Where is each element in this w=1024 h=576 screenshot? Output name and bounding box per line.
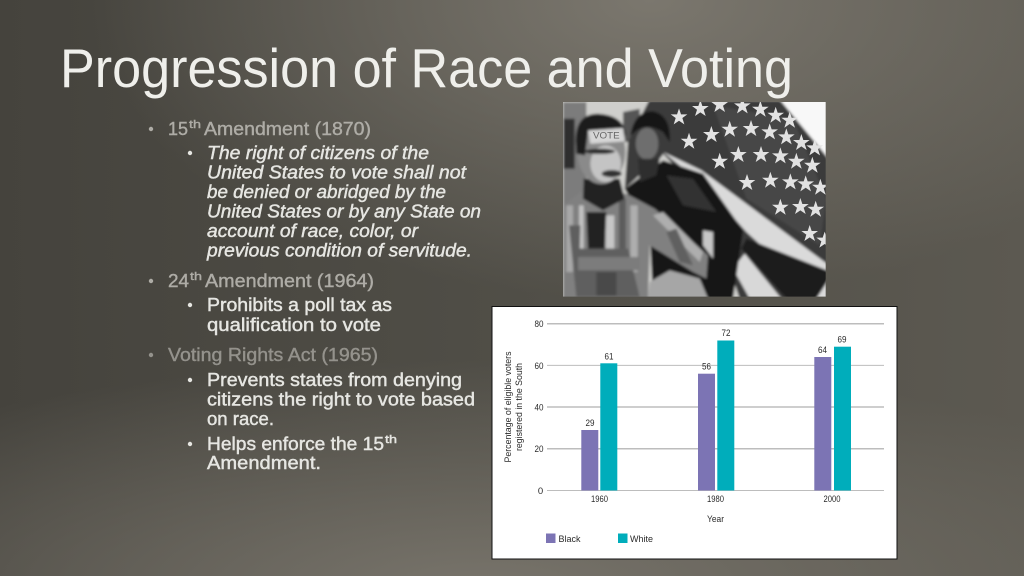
- y axis labels: [534, 319, 544, 497]
- x axis labels: 1960: [591, 494, 608, 505]
- sub-bullet: quotation of the 15th Amendment: be denied or abridged by the: [207, 181, 446, 202]
- legend: White: [618, 534, 653, 545]
- sub-bullet: helps enforce: th: [385, 434, 397, 446]
- sub-bullet: poll tax: [188, 294, 392, 335]
- bullet: 15th Amendment heading: Amendment (1870): [204, 118, 371, 139]
- bars: 1960: 29: [586, 418, 594, 429]
- sub-bullet: prevents denial: on race.: [207, 408, 274, 429]
- legend: Black: Black: [558, 534, 581, 545]
- y axis title: Percentage of eligible voters: [503, 351, 514, 462]
- bars: 2000: 64: [818, 345, 827, 356]
- legend: Black: [546, 534, 581, 545]
- sub-bullet: quotation of the 15th Amendment: United States or by any State on: [207, 200, 481, 222]
- y axis labels: 20: [534, 444, 544, 455]
- sub-bullet: quotation of the 15th Amendment: previous condition of servitude.: [206, 240, 472, 260]
- sub-bullet: helps enforce: Helps enforce the 15: [207, 433, 384, 454]
- sub-bullet: prevents denial: [188, 369, 475, 429]
- bars: 1960: 61: [604, 352, 614, 362]
- y axis labels: 80: [534, 319, 544, 330]
- x axis labels: [591, 494, 840, 505]
- sub-bullet: prevents denial: citizens the right to vote based: [207, 388, 475, 410]
- bars: 1980: 56: [702, 362, 711, 372]
- bullet: 24th Amendment heading: Amendment (1964): [205, 270, 374, 291]
- y axis title: registered in the South: [514, 363, 525, 451]
- sub-bullet: poll tax: qualification to vote: [207, 314, 381, 335]
- sub-bullet: quotation of the 15th Amendment: account of race, color, or: [207, 220, 419, 241]
- gridlines: [547, 324, 884, 490]
- y axis title: [503, 351, 525, 462]
- bullet: 24th Amendment heading: 24: [168, 270, 189, 291]
- text block: bullet list: [149, 118, 481, 473]
- y axis labels: 40: [534, 402, 544, 414]
- x axis labels: 2000: [824, 494, 840, 505]
- x axis labels: 1980: [707, 494, 724, 505]
- chart panel: [492, 306, 897, 559]
- y axis labels: 0: [538, 486, 543, 497]
- sub-bullet: quotation of the 15th Amendment: [188, 142, 481, 260]
- sub-bullet: poll tax: Prohibits a poll tax as: [207, 294, 392, 315]
- bullet: 15th Amendment heading: 15: [168, 118, 188, 139]
- photo detail: forehead VOTE: VOTE: [593, 130, 620, 140]
- legend: White: White: [630, 534, 653, 545]
- sub-bullet: helps enforce: [188, 433, 397, 473]
- bullet: 24th Amendment heading: th: [190, 271, 202, 283]
- bullet: Voting Rights Act heading: Voting Rights Act (1965): [168, 344, 378, 365]
- bars: 2000: 69: [838, 334, 846, 346]
- bars: 1980: 72: [722, 328, 730, 339]
- bullet: 15th Amendment heading: th: [189, 119, 201, 131]
- sub-bullet: prevents denial: Prevents states from denying: [207, 369, 462, 390]
- photo detail: flag stars: [671, 96, 833, 248]
- bars: 2000: [814, 334, 851, 490]
- bars: 1980: [698, 328, 734, 490]
- x axis title: Year: [707, 514, 724, 525]
- sub-bullet: quotation of the 15th Amendment: The right of citizens of the: [207, 142, 429, 163]
- photo: voting rights marchers with flag: [560, 96, 833, 299]
- sub-bullet: quotation of the 15th Amendment: United States to vote shall not: [207, 162, 467, 182]
- y axis labels: 60: [534, 361, 544, 372]
- sub-bullet: helps enforce: Amendment.: [207, 452, 321, 473]
- title: Progression of Race and Voting: [60, 37, 793, 99]
- bar chart: voter registration in the South: [492, 306, 897, 559]
- bars: 1960: [581, 352, 617, 490]
